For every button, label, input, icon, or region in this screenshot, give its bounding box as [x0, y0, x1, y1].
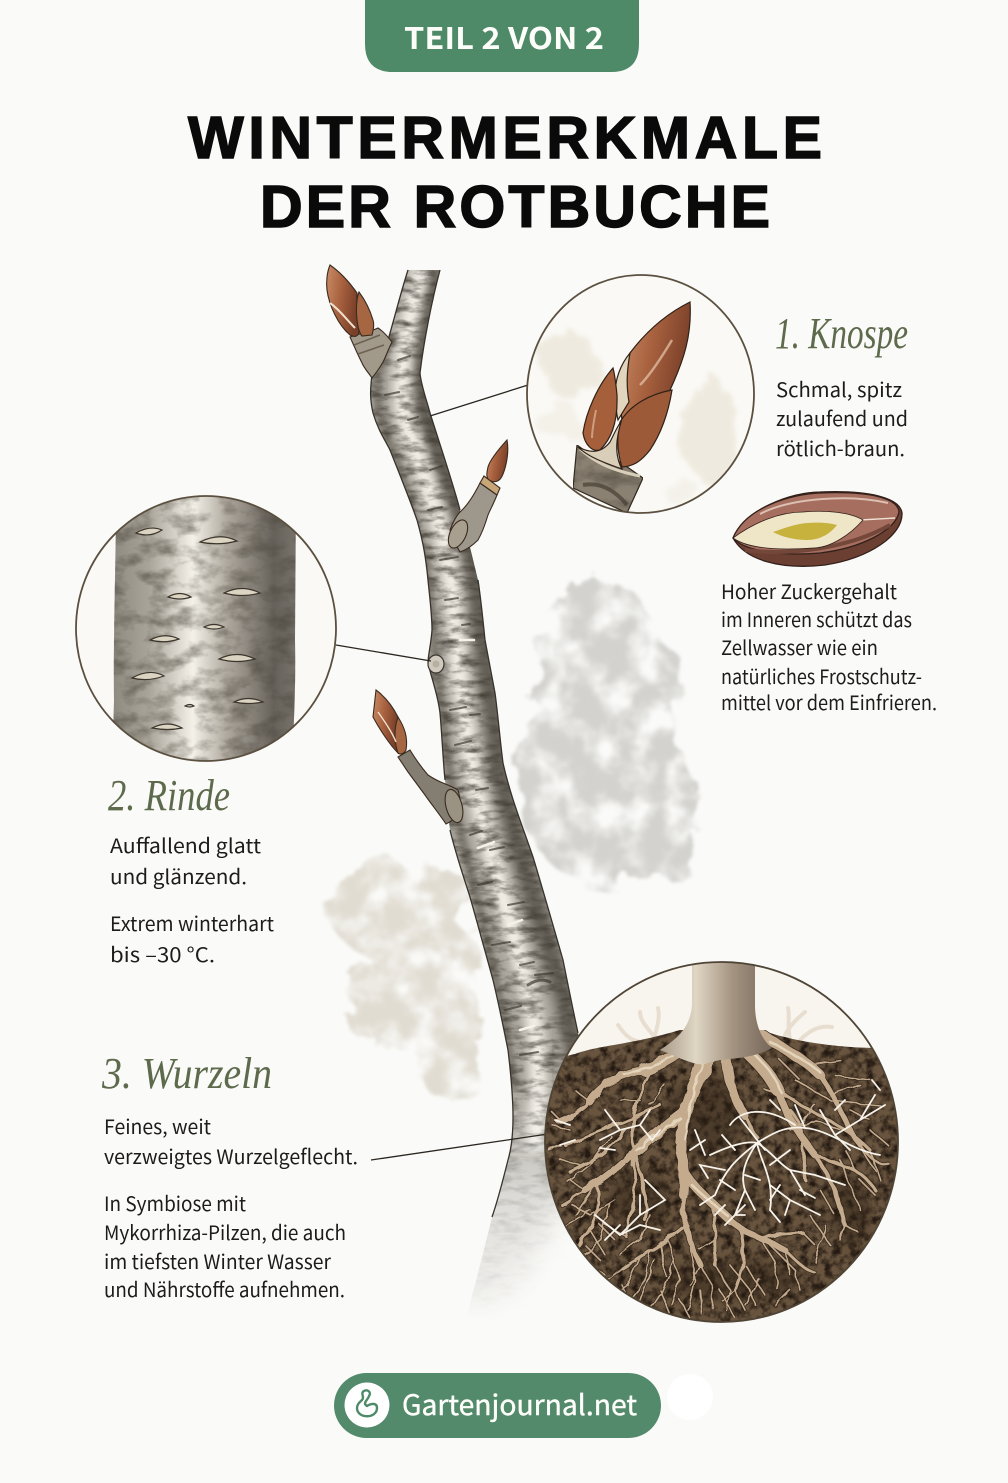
text: Rinde description: und glänzend.	[110, 861, 247, 890]
heading: Knospe: 1. Knospe	[775, 309, 908, 358]
text: Knospe description: Schmal, spitz	[776, 374, 902, 403]
text: Wurzeln description: Feines, weit	[104, 1111, 211, 1140]
main roots	[683, 1195, 700, 1265]
lenticels	[385, 356, 553, 1055]
soil	[540, 1030, 910, 1330]
text: Knospe description	[776, 374, 908, 462]
leader lines	[336, 385, 548, 1160]
root system	[548, 1030, 890, 1318]
detail circle: roots	[540, 960, 910, 1330]
top badge	[365, 0, 639, 72]
trunk	[371, 270, 578, 1302]
bark lenticels	[132, 528, 263, 730]
stem base	[660, 960, 772, 1064]
text: Wurzeln description: im tiefsten Winter Wasser	[104, 1246, 331, 1275]
branch with trunk and buds	[326, 264, 579, 1302]
detail circle: bud	[527, 275, 754, 513]
upper left twig with bud	[327, 265, 392, 378]
text: sugar content: mittel vor dem Einfrieren.	[721, 687, 937, 716]
footer badge	[334, 1373, 661, 1438]
text: Wurzeln description	[104, 1111, 358, 1303]
ground plants	[618, 1008, 832, 1042]
footer badge: Gartenjournal.net	[402, 1384, 637, 1424]
text: Knospe description: zulaufend und	[776, 403, 908, 432]
text: Rinde description: Extrem winterhart	[110, 908, 274, 937]
text: sugar content: Zellwasser wie ein	[721, 632, 878, 661]
text: Wurzeln description: verzweigtes Wurzelgeflecht.	[104, 1141, 358, 1170]
bud stem	[573, 445, 643, 513]
logo icon	[344, 1382, 390, 1428]
bud scales	[578, 302, 690, 469]
text: sugar content: im Inneren schützt das	[721, 604, 912, 633]
text: Knospe description: rötlich-braun.	[776, 433, 905, 462]
top badge: TEIL 2 VON 2	[404, 14, 604, 58]
heading: Rinde: 2. Rinde	[108, 771, 230, 820]
root highlights	[625, 1042, 820, 1216]
heading: Wurzeln: 3. Wurzeln	[101, 1049, 272, 1098]
decorative white dot	[667, 1374, 713, 1420]
text: Rinde description: bis –30 °C.	[110, 939, 215, 968]
title: DER ROTBUCHE	[260, 174, 770, 240]
detail circle: bark	[76, 496, 336, 770]
seed cross-section	[733, 492, 902, 566]
watercolor wash: beige	[330, 855, 487, 1100]
text: sugar content	[721, 576, 937, 716]
middle right twig with bud	[444, 440, 508, 552]
text: Wurzeln description: und Nährstoffe aufnehmen.	[104, 1274, 345, 1303]
mycorrhiza	[555, 1080, 885, 1240]
branch node	[428, 655, 444, 673]
text: sugar content: natürliches Frostschutz-	[721, 661, 922, 690]
text: Rinde description	[110, 830, 274, 968]
trunk outline	[371, 270, 578, 1217]
bark highlights	[460, 640, 534, 1030]
title	[188, 105, 822, 240]
text: Wurzeln description: Mykorrhiza-Pilzen, die auch	[104, 1217, 346, 1246]
watercolor wash: grey	[515, 580, 700, 885]
text: sugar content: Hoher Zuckergehalt	[721, 576, 897, 605]
text: Wurzeln description: In Symbiose mit	[104, 1188, 246, 1217]
title: WINTERMERKMALE	[188, 105, 822, 171]
soil shadows	[610, 1075, 870, 1300]
text: Rinde description: Auffallend glatt	[110, 830, 261, 859]
lower left twig with bud	[373, 690, 466, 824]
